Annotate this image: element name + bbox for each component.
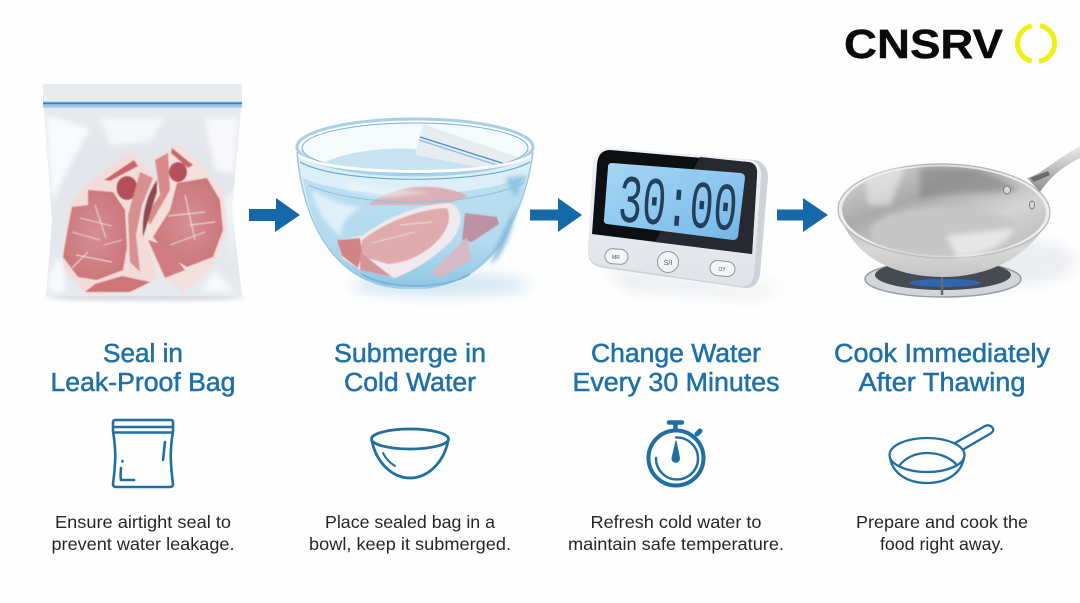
step 1 heading: Leak-Proof Bag — [50, 369, 236, 397]
timer buttons — [604, 248, 736, 277]
icon: frying pan — [890, 425, 993, 483]
step 4 heading: Cook Immediately — [834, 340, 1050, 368]
timer digits: 30:00 — [615, 165, 740, 251]
gas burner — [865, 260, 1021, 297]
photo: stainless frying pan on gas burner — [837, 146, 1080, 297]
step 4 heading: After Thawing — [858, 369, 1026, 397]
step 2 description: bowl, keep it submerged. — [309, 534, 511, 554]
arrow 3 — [777, 198, 828, 232]
step 3 description: maintain safe temperature. — [568, 534, 784, 554]
meat: chop in water — [337, 203, 460, 278]
rivets — [1004, 186, 1034, 209]
step 2 heading: Submerge in — [334, 340, 486, 368]
pan handle — [1027, 146, 1080, 192]
icon: zip bag — [113, 420, 173, 487]
photo: digital kitchen timer reading 30:00 — [588, 148, 785, 298]
sealed bag corner — [415, 124, 520, 170]
glass rim — [297, 119, 533, 288]
photo: pork chops in sealed bag — [43, 84, 245, 301]
step 3 heading: Change Water — [591, 340, 762, 368]
logo: CNSRV — [844, 21, 1055, 67]
pan body — [838, 207, 1050, 277]
step 3 description: Refresh cold water to — [590, 512, 762, 532]
step 4 description: food right away. — [880, 534, 1004, 554]
timer buttons: S/I — [664, 260, 672, 267]
step 1 description: prevent water leakage. — [52, 534, 234, 554]
LCD screen — [604, 163, 745, 240]
step 2 heading: Cold Water — [344, 369, 477, 397]
step 2 heading — [334, 340, 486, 397]
photo: chops in glass bowl of water — [297, 119, 533, 296]
step 4 description — [856, 512, 1028, 554]
step 2 description — [309, 512, 511, 554]
icon: stopwatch — [648, 422, 704, 486]
step 2 description: Place sealed bag in a — [325, 512, 495, 532]
step 1 heading — [50, 340, 236, 397]
step 3 heading — [572, 340, 780, 397]
step 3 heading: Every 30 Minutes — [572, 369, 780, 397]
meat: left chop — [62, 152, 158, 295]
step 3 description — [568, 512, 784, 554]
step 4 heading — [834, 340, 1050, 397]
step 1 heading: Seal in — [103, 340, 183, 368]
meat: right chop — [143, 145, 227, 292]
arrow 1 — [249, 198, 300, 232]
timer buttons: OY — [718, 267, 726, 273]
step 4 description: Prepare and cook the — [856, 512, 1028, 532]
step 1 description: Ensure airtight seal to — [55, 512, 231, 532]
step 1 description — [52, 512, 234, 554]
icon: bowl — [372, 429, 448, 478]
timer buttons: MR — [612, 255, 620, 261]
arrow 2 — [530, 198, 582, 232]
logo: CNSRV: CNSRV — [844, 21, 1004, 67]
